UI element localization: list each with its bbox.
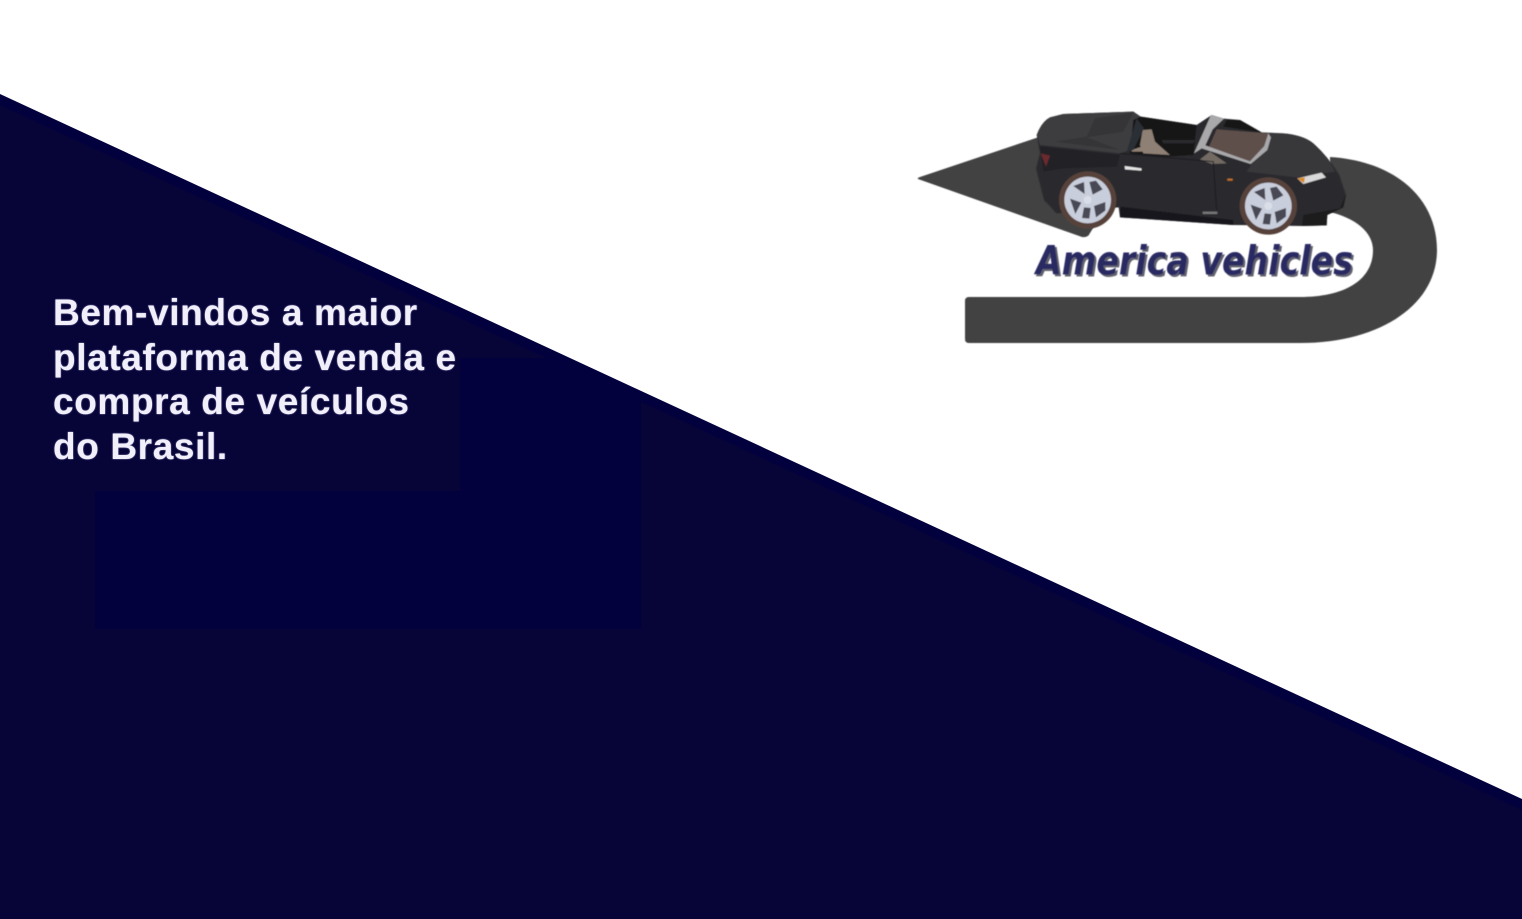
rear wheel (1059, 171, 1116, 229)
front wheel (1240, 177, 1297, 235)
welcome text block: Bem-vindos a maior (53, 292, 418, 333)
car body (1036, 112, 1346, 226)
welcome text block: plataforma de venda e (53, 336, 457, 378)
rear deck (1037, 112, 1141, 153)
door details (1125, 166, 1142, 171)
welcome text block: compra de veículos (53, 381, 410, 422)
road arrow track (918, 135, 1437, 343)
welcome text block (53, 292, 457, 466)
brand name: America vehicles (1034, 238, 1353, 284)
lights (1041, 153, 1050, 167)
hood (1247, 133, 1335, 177)
icon: convertible car (1036, 112, 1346, 235)
windscreen (1208, 129, 1268, 162)
brand name: America vehicles (1036, 240, 1355, 286)
welcome text block: do Brasil. (53, 426, 228, 466)
cabin interior (1130, 117, 1197, 157)
